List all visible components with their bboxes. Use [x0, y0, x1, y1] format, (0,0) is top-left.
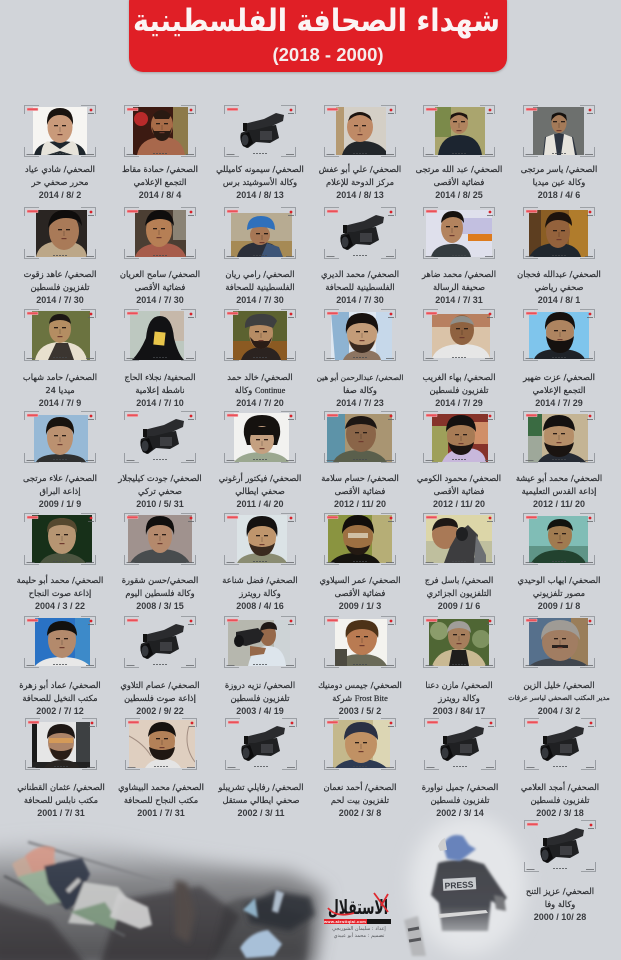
website bar: [324, 919, 391, 924]
card: Hamada Maqat: التجمع الإعلامي: [134, 177, 186, 187]
card: Alaa Murtaja: إذاعة البراق: [40, 486, 80, 496]
card: Ihab al-Wahidi: الصحفي/ ايهاب الوحيدي: [518, 575, 600, 585]
card: Abdulrahman Abu Hein: [317, 309, 403, 408]
card: Bahaa al-Gharib: 2014 / 7/ 29: [435, 398, 483, 408]
card: Mazen Dana: 2003 / 84/ 17: [433, 706, 485, 716]
card: Hassan Shaqoura: [110, 513, 210, 625]
card: Mahmoud al-Koumi: الصحفي/ محمود الكومي: [417, 473, 501, 483]
panel: row 5: [0, 513, 621, 611]
card: Yasser Murtaja: الصحفي/ ياسر مرتجى: [521, 164, 597, 174]
card: Omar al-Silawi: فضائية الأقصى: [335, 588, 385, 598]
card: Khalil al-Zein: الصحفي/ خليل الزين: [523, 680, 595, 690]
card: Jamil Nawawra: الصحفي/ جميل نواورة: [422, 782, 498, 792]
card: Sameh al-Aryan: فضائية الأقصى: [135, 282, 185, 292]
photo: Alaa Murtaja: [24, 411, 96, 463]
photo: Bahaa al-Gharib: [423, 309, 495, 361]
card: Mohammed Daher: صحيفة الرسالة: [433, 282, 485, 292]
photo: James Miller: [324, 616, 396, 668]
title panel: [129, 0, 507, 72]
card: Mohammed al-Bishawi: الصحفي/ محمد البيشاوي: [118, 782, 204, 792]
card: Mohammed Daher: [422, 207, 496, 305]
card: Mahmoud al-Koumi: 2012 / 11/ 20: [433, 499, 485, 509]
card: Amjad al-Alami: الصحفي/ أمجد العلامي: [521, 782, 599, 792]
card: Simone Camilli: 2014 / 8/ 13: [236, 190, 284, 200]
card: Omar al-Silawi: الصحفي/ عمر السيلاوي: [319, 575, 401, 585]
panel: row 2: [24, 207, 601, 305]
card: Raffaele Ciriello: [211, 718, 311, 830]
card: Hamed Shehab: [23, 309, 97, 408]
photo: Mazen Dana: [423, 616, 495, 668]
card: Ali Abu Afash: 2014 / 8/ 13: [336, 190, 384, 200]
photo: Sameh al-Aryan: [124, 207, 196, 259]
card: Khaled Hamad: الصحفي/ خالد حمد: [227, 372, 293, 382]
card: Bahaa al-Gharib: الصحفي/ بهاء الغريب: [422, 372, 496, 382]
card: Shadi Ayyad: [24, 105, 96, 200]
card: Basel Faraj: 2009 / 1/ 6: [438, 601, 480, 611]
card: Abdulrahman Abu Hein: 2014 / 7/ 23: [336, 398, 384, 408]
card: Rami Rayan: الصحفي/ رامي ريان: [225, 269, 295, 279]
card: Mohammed Abu Halima: [10, 513, 110, 625]
card: Basel Faraj: [409, 513, 509, 625]
credits: تصميم : محمد أبو عبيدي: [334, 933, 384, 939]
card: Najla al-Hajj: [124, 309, 196, 408]
card: Hamed Shehab: الصحفي/ حامد شهاب: [23, 372, 97, 382]
card: Hossam Salama: [310, 411, 410, 523]
photo: Vittorio Arrigoni: [224, 411, 296, 463]
card: Fadel Shanaa: الصحفي/ فضل شناعة: [222, 575, 298, 585]
photo: Hassan Shaqoura: [124, 513, 196, 565]
photo: Rami Rayan: [224, 207, 296, 259]
website bar: www.alestiqlal.com: [324, 919, 366, 924]
photo: Abdullah Fajjan: [523, 207, 595, 259]
card: Mohammed Daher: الصحفي/ محمد ضاهر: [422, 269, 496, 279]
card: Mazen Dana: الصحفي/ مازن دعنا: [425, 680, 493, 690]
card: Ali Abu Afash: مركز الدوحة للإعلام: [326, 177, 394, 187]
card: Abdulrahman Abu Hein: الصحفي/ عبدالرحمن أبو هين: [317, 373, 403, 382]
mourner figure: [245, 891, 315, 931]
card: Yasser Murtaja: [521, 105, 597, 200]
card: Issam al-Tilawi: 2002 / 9/ 22: [136, 706, 184, 716]
card: Shadi Ayyad: 2014 / 8/ 2: [39, 190, 81, 200]
card: Vittorio Arrigoni: الصحفي/ فيكتور أرغوني: [219, 473, 301, 483]
card: Mahmoud al-Koumi: [409, 411, 509, 523]
photo: Najla al-Hajj: [124, 309, 196, 361]
funeral crowd: [0, 840, 325, 960]
card: Bahaa al-Gharib: [422, 309, 496, 408]
card: Alaa Murtaja: الصحفي/ علاء مرتجى: [23, 473, 97, 483]
photo: Hamada Maqat: [124, 105, 196, 157]
card: Hassan Shaqoura: وكالة فلسطين اليوم: [125, 588, 195, 598]
card: Nazih Darwazeh: 2003 / 4/ 19: [236, 706, 284, 716]
panel: row 4: [0, 411, 621, 507]
card: Ihab al-Wahidi: مصور تلفزيوني: [533, 588, 585, 598]
card: Mohammed Abu Halima: إذاعة صوت النجاح: [29, 588, 91, 598]
card: Hossam Salama: 2012 / 11/ 20: [334, 499, 386, 509]
card: Amjad al-Alami: تلفزيون فلسطين: [531, 795, 589, 805]
card: Simone Camilli: وكالة الأسوشيتد برس: [223, 177, 297, 187]
card: Khaled Hamad: [224, 309, 296, 408]
photo: Abdulrahman Abu Hein: [324, 309, 396, 361]
card: Mohammed al-Dairi: الفلسطينية للصحافة: [325, 282, 395, 292]
card: James Dominick: 2003 / 5/ 2: [339, 706, 381, 716]
photo: Mohammed Daher: [423, 207, 495, 259]
card: Mazen Dana: وكالة رويترز: [438, 693, 480, 703]
card: Yasser Murtaja: 2018 / 4/ 6: [538, 190, 580, 200]
card: Mohammed Abu Halima: الصحفي/ محمد أبو حليمة: [17, 575, 103, 585]
card: Vittorio Arrigoni: صحفي ايطالي: [235, 486, 285, 496]
card: Ihab al-Wahidi: 2009 / 1/ 8: [538, 601, 580, 611]
card: Rami Rayan: 2014 / 7/ 30: [236, 295, 284, 305]
card: Basel Faraj: التلفزيون الجزائري: [427, 588, 491, 598]
card: Hamada Maqat: الصحفي/ حمادة مقاط: [122, 164, 198, 174]
card: Mohammed al-Bishawi: مكتب النجاح للصحافة: [124, 795, 198, 805]
card: Nazih Darwazeh: تلفزيون فلسطين: [231, 693, 289, 703]
camera placeholder: Aziz al-Tanah: [524, 820, 596, 872]
card: Omar al-Silawi: [310, 513, 410, 625]
card: Mohammed Daher: 2014 / 7/ 31: [435, 295, 483, 305]
card: Alaa Murtaja: [10, 411, 110, 523]
card: Khalil al-Zein: مدير المكتب الصحفي لياسر عرفات: [508, 694, 610, 702]
card: Rami Rayan: الفلسطينية للصحافة: [225, 282, 295, 292]
panel: row 3: [23, 309, 595, 408]
card: Cevdet Kiliclar: [110, 411, 210, 523]
card: Cevdet Kiliclar: 2010 / 5/ 31: [136, 499, 184, 509]
card: Fadel Shanaa: 2008 / 4/ 16: [236, 601, 284, 611]
card: Ahed Zaqout: 2014 / 7/ 30: [36, 295, 84, 305]
camera placeholder: Raffaele Ciriello: [225, 718, 297, 770]
card: Ahmed Noman: 2002 / 3/ 8: [339, 808, 381, 818]
card: Ezzat Duheir: الصحفي/ عزت ضهير: [523, 372, 595, 382]
panel: row 8: [510, 820, 610, 924]
photo: Hamed Shehab: [24, 309, 96, 361]
card: Simone Camilli: [216, 105, 304, 200]
card: Hamed Shehab: ميديا 24: [45, 385, 75, 395]
card: Abdullah Fajjan: صحفي رياضي: [535, 282, 583, 292]
card: Simone Camilli: الصحفي/ سيمونه كاميللي: [216, 164, 304, 174]
card: Imad Abu Zahra: [10, 616, 110, 728]
card: Raffaele Ciriello: صحفي ايطالي مستقل: [222, 795, 300, 805]
panel: row 6: [0, 616, 621, 716]
card: Jamil Nawawra: تلفزيون فلسطين: [431, 795, 489, 805]
card: Ali Abu Afash: [319, 105, 401, 200]
card: Vittorio Arrigoni: [210, 411, 310, 523]
card: Ahmed Noman: [310, 718, 410, 830]
card: Omar al-Silawi: 2009 / 1/ 3: [339, 601, 381, 611]
card: Bahaa al-Gharib: تلفزيون فلسطين: [430, 385, 488, 395]
card: Abdullah Murtaja: [416, 105, 502, 200]
card: Othman al-Qatnani: [11, 718, 111, 830]
card: Abdullah Murtaja: الصحفي/ عبد الله مرتجى: [416, 164, 502, 174]
card: Imad Abu Zahra: الصحفي/ عماد أبو زهرة: [19, 680, 101, 690]
card: Aziz al-Tanah: 2000 / 10/ 28: [534, 912, 586, 922]
card: Hassan Shaqoura: 2008 / 3/ 15: [136, 601, 184, 611]
card: Alaa Murtaja: 2009 / 1/ 9: [39, 499, 81, 509]
photo: Ali Abu Afash: [324, 105, 396, 157]
card: Hamada Maqat: [122, 105, 198, 200]
card: Khaled Hamad: وكالة Continue: [235, 385, 285, 395]
background collage: funeral and press photographer: [0, 814, 527, 960]
card: Aziz al-Tanah: وكالة وفا: [545, 899, 575, 909]
card: Sameh al-Aryan: 2014 / 7/ 30: [136, 295, 184, 305]
card: James Dominick: شركة Frost Bite: [332, 693, 388, 703]
photo: Mohammed Abu Aisha: [523, 411, 595, 463]
card: Shadi Ayyad: محرر صحفي حر: [32, 177, 88, 187]
photo: Khalil al-Zein: [523, 616, 595, 668]
panel: row 1: [24, 105, 597, 200]
card: Imad Abu Zahra: 2002 / 7/ 12: [36, 706, 84, 716]
card: Ahmed Noman: تلفزيون بيت لحم: [331, 795, 389, 805]
card: Hamada Maqat: 2014 / 8/ 4: [139, 190, 181, 200]
card: Ezzat Duheir: 2014 / 7/ 29: [535, 398, 583, 408]
photo: Mohammed Abu Halima: [24, 513, 96, 565]
card: James Dominick: الصحفي/ جيمس دومنيك: [318, 680, 402, 690]
card: Issam al-Tilawi: [110, 616, 210, 728]
photo: Ahmed Noman: [324, 718, 396, 770]
card: Mohammed Abu Aisha: 2012 / 11/ 20: [533, 499, 585, 509]
card: Ahed Zaqout: تلفزيون فلسطين: [31, 282, 89, 292]
press photographer in smoke: [404, 815, 526, 956]
photo: Mahmoud al-Koumi: [423, 411, 495, 463]
card: Cevdet Kiliclar: الصحفي/ جودت كيليجلار: [118, 473, 202, 483]
card: Amjad al-Alami: 2002 / 3/ 18: [536, 808, 584, 818]
camera placeholder: Amjad al-Alami: [524, 718, 596, 770]
card: Issam al-Tilawi: الصحفي/ عصام التلاوي: [120, 680, 200, 690]
card: Mazen Dana: [409, 616, 509, 728]
card: Nazih Darwazeh: الصحفي/ نزيه دروزة: [225, 680, 295, 690]
card: Abdullah Fajjan: [517, 207, 601, 305]
card: Abdulrahman Abu Hein: وكالة صفا: [343, 385, 377, 395]
card: Fadel Shanaa: وكالة رويترز: [239, 588, 281, 598]
card: James Dominick: [310, 616, 410, 728]
card: Othman al-Qatnani: الصحفي/ عثمان القطناني: [17, 782, 105, 792]
photo: Hossam Salama: [324, 411, 396, 463]
card: Abdullah Fajjan: الصحفي/ عبدالله فحجان: [517, 269, 601, 279]
photo: Mohammed al-Bishawi: [125, 718, 197, 770]
card: Abdullah Murtaja: فضائية الأقصى: [434, 177, 484, 187]
card: Issam al-Tilawi: إذاعة صوت فلسطين: [124, 693, 196, 703]
card: Hassan Shaqoura: الصحفي/حسن شقورة: [122, 575, 198, 585]
card: Khalil al-Zein: [509, 616, 609, 728]
photo: Imad Abu Zahra: [24, 616, 96, 668]
press label: PRESS: [444, 879, 474, 891]
card: Othman al-Qatnani: 2001 / 7/ 31: [37, 808, 85, 818]
card: Abdullah Murtaja: 2014 / 8/ 25: [435, 190, 483, 200]
photo: Ezzat Duheir: [523, 309, 595, 361]
card: Vittorio Arrigoni: 2011 / 4/ 20: [236, 499, 284, 509]
photo: Ahed Zaqout: [24, 207, 96, 259]
photo: Basel Faraj: [423, 513, 495, 565]
card: Rami Rayan: [224, 207, 296, 305]
camera placeholder: Issam al-Tilawi: [124, 616, 196, 668]
card: Abdullah Fajjan: 2014 / 8/ 1: [538, 295, 580, 305]
card: Sameh al-Aryan: الصحفي/ سامح العريان: [120, 269, 200, 279]
card: Aziz al-Tanah: الصحفي/ عزيز التنح: [526, 886, 594, 896]
card: Mohammed Abu Aisha: الصحفي/ محمد أبو عيشة: [516, 473, 602, 483]
photo: Nazih Darwazeh: [224, 616, 296, 668]
card: Mohammed al-Bishawi: [111, 718, 211, 830]
card: Hamed Shehab: 2014 / 7/ 9: [39, 398, 81, 408]
card: Yasser Murtaja: وكالة عين ميديا: [533, 177, 585, 187]
card: Jamil Nawawra: [410, 718, 510, 830]
photo: Fadel Shanaa: [224, 513, 296, 565]
card: Shadi Ayyad: الصحفي/ شادي عياد: [25, 164, 95, 174]
card: Mohammed Abu Halima: 2004 / 3 / 22: [35, 601, 85, 611]
card: Ali Abu Afash: الصحفي/ علي أبو عفش: [319, 164, 401, 174]
camera placeholder: Simone Camilli: [224, 105, 296, 157]
photo: Yasser Murtaja: [523, 105, 595, 157]
card: Fadel Shanaa: [210, 513, 310, 625]
card: Ezzat Duheir: التجمع الإعلامي: [533, 385, 585, 395]
card: Khaled Hamad: 2014 / 7/ 20: [236, 398, 284, 408]
logo: Al-Estiklal: [322, 888, 394, 942]
card: Mohammed al-Dairi: الصحفي/ محمد الديري: [321, 269, 399, 279]
card: Nazih Darwazeh: [210, 616, 310, 728]
card: Basel Faraj: الصحفي/ باسل فرج: [425, 575, 493, 585]
credits: إعداد : سليمان الشوربجي: [332, 926, 386, 932]
card: Raffaele Ciriello: 2002 / 3/ 11: [237, 808, 285, 818]
year range: (2018 - 2000): [272, 44, 384, 65]
camera placeholder: Jamil Nawawra: [424, 718, 496, 770]
card: Ahmed Noman: الصحفي/ أحمد نعمان: [324, 782, 396, 792]
photo: Othman al-Qatnani: [25, 718, 97, 770]
credits: [322, 926, 396, 940]
card: Ahed Zaqout: [24, 207, 96, 305]
card: Cevdet Kiliclar: صحفي تركي: [138, 486, 182, 496]
camera placeholder: Cevdet Kiliclar: [124, 411, 196, 463]
card: Hossam Salama: فضائية الأقصى: [335, 486, 385, 496]
photo: Abdullah Murtaja: [423, 105, 495, 157]
flag-draped body: [12, 846, 152, 930]
card: Ihab al-Wahidi: [509, 513, 609, 625]
photo: Ihab al-Wahidi: [523, 513, 595, 565]
card: Sameh al-Aryan: [120, 207, 200, 305]
card: Mohammed Abu Aisha: إذاعة القدس التعليمية: [522, 486, 596, 496]
photo: Shadi Ayyad: [24, 105, 96, 157]
card: Ezzat Duheir: [522, 309, 595, 408]
card: Jamil Nawawra: 2002 / 3/ 14: [436, 808, 484, 818]
card: Najla al-Hajj: ناشطة إعلامية: [135, 385, 185, 395]
card: Najla al-Hajj: 2014 / 7/ 10: [136, 398, 184, 408]
panel: row 7: [0, 718, 621, 818]
card: Mahmoud al-Koumi: فضائية الأقصى: [434, 486, 484, 496]
card: Mohammed al-Dairi: 2014 / 7/ 30: [336, 295, 384, 305]
card: Hossam Salama: الصحفي/ حسام سلامة: [321, 473, 399, 483]
card: Mohammed al-Dairi: [321, 207, 399, 305]
card: Khalil al-Zein: 2004 / 3/ 2: [538, 706, 580, 716]
card: Mohammed Abu Aisha: [509, 411, 609, 523]
card: Othman al-Qatnani: مكتب نابلس للصحافة: [24, 795, 98, 805]
card: Imad Abu Zahra: مكتب النخيل للصحافة: [22, 693, 98, 703]
photo: Omar al-Silawi: [324, 513, 396, 565]
card: Aziz al-Tanah: [510, 820, 610, 932]
card: Raffaele Ciriello: الصحفي/ رفايلي تشريبلو: [218, 782, 304, 792]
camera placeholder: Mohammed al-Dairi: [324, 207, 396, 259]
card: Mohammed al-Bishawi: 2001 / 7/ 31: [137, 808, 185, 818]
card: Amjad al-Alami: [510, 718, 610, 830]
card: Najla al-Hajj: الصحفية/ نجلاء الحاج: [124, 372, 196, 382]
photo: Khaled Hamad: [224, 309, 296, 361]
card: Ahed Zaqout: الصحفي/ عاهد زقوت: [24, 269, 96, 279]
